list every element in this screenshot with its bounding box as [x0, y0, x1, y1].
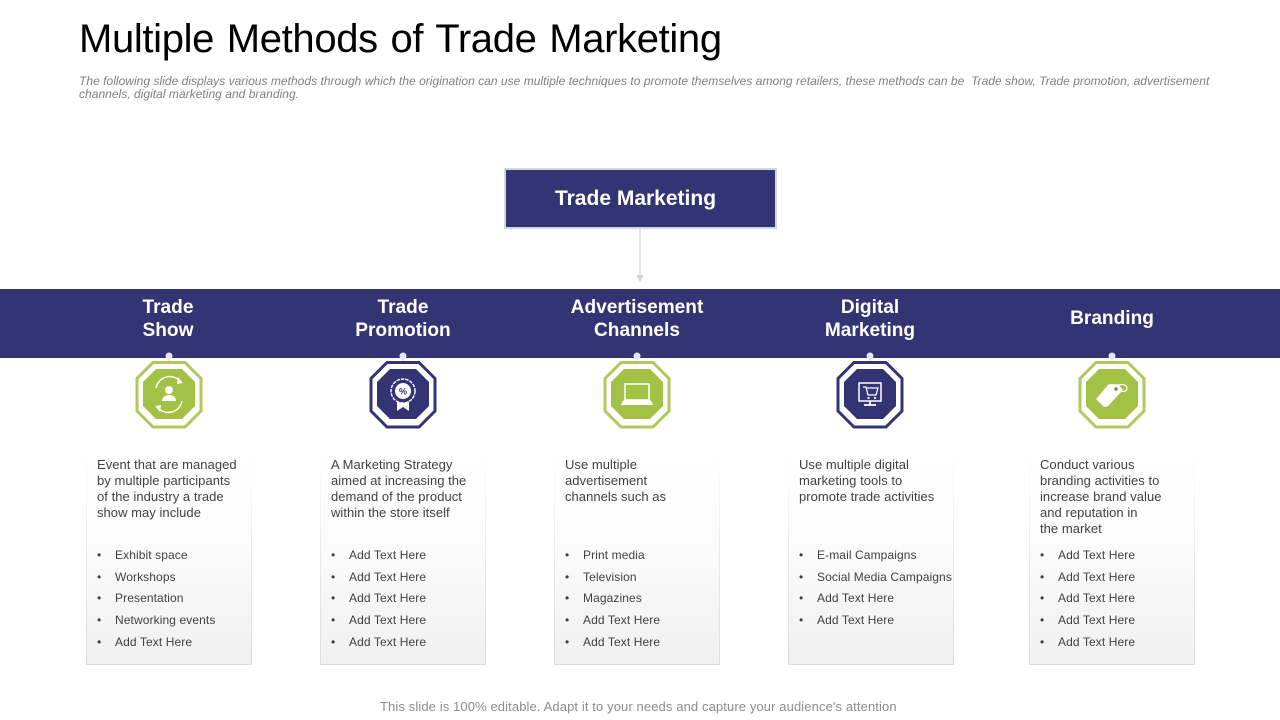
subtitle description: channels, digital marketing and branding. — [79, 87, 299, 101]
list: Trade Promotion bullets: Add Text Here — [349, 613, 426, 627]
icon: advertisement channels badge — [604, 352, 670, 428]
list: Advertisement Channels bullets: Magazines — [583, 591, 642, 605]
text: Branding description: Conduct various — [1040, 457, 1135, 472]
heading: Advertisement Channels: Advertisement — [571, 297, 703, 318]
text: Digital Marketing description: marketing tools to — [799, 473, 902, 488]
card: Trade Show — [86, 455, 252, 665]
text: Branding description: branding activities to — [1040, 473, 1159, 488]
list: Digital Marketing bullets: Social Media Campaigns — [817, 570, 952, 584]
text: Trade Promotion description: aimed at increasing the — [331, 473, 466, 488]
text: Branding description: and reputation in — [1040, 505, 1138, 520]
list: Advertisement Channels bullets — [566, 548, 660, 649]
text: Branding description: increase brand value — [1040, 489, 1162, 504]
list: Digital Marketing bullets: Add Text Here — [817, 613, 894, 627]
list: Trade Promotion bullets: Add Text Here — [349, 635, 426, 649]
text: Trade Show description: Event that are managed — [97, 457, 237, 472]
banner: method headings — [0, 289, 1280, 358]
text: Trade Show description: of the industry a trade — [97, 489, 224, 504]
root box: Trade Marketing: Trade Marketing — [555, 187, 716, 210]
card: Branding — [1029, 455, 1195, 665]
heading: Branding: Branding — [1070, 308, 1154, 329]
heading: Digital Marketing — [825, 297, 915, 341]
list: Advertisement Channels bullets: Print media — [583, 548, 645, 562]
subtitle description: The following slide displays various methods through which the origination can use multiple techniques to promote themselves among retailers, these methods can be Trade show, Trade promotion, advertisement — [79, 74, 1209, 88]
list: Branding bullets: Add Text Here — [1058, 570, 1135, 584]
list: Trade Show bullets: Presentation — [115, 591, 184, 605]
heading: Trade Show — [142, 297, 194, 341]
text: Trade Promotion description: within the store itself — [331, 505, 450, 520]
heading: Digital Marketing: Marketing — [825, 320, 915, 341]
list: Advertisement Channels bullets: Television — [583, 570, 637, 584]
list: Trade Show bullets: Exhibit space — [115, 548, 188, 562]
icon: trade show badge — [136, 352, 202, 428]
heading: Advertisement Channels — [571, 297, 704, 341]
subtitle description — [79, 74, 1210, 101]
list: Advertisement Channels bullets: Add Text Here — [583, 613, 660, 627]
list: Branding bullets: Add Text Here — [1058, 548, 1135, 562]
title: Multiple Methods of Trade Marketing — [79, 17, 722, 61]
text: Trade Show description: show may include — [97, 505, 201, 520]
text: Branding description — [1040, 457, 1162, 536]
list: Branding bullets: Add Text Here — [1058, 613, 1135, 627]
card: Trade Promotion — [320, 455, 486, 665]
heading: Trade Promotion: Trade — [378, 297, 428, 318]
text: Advertisement Channels description: Use multiple — [565, 457, 637, 472]
list: Trade Show bullets — [98, 548, 215, 649]
icon: trade promotion badge — [370, 352, 436, 428]
footer note: This slide is 100% editable. Adapt it to your needs and capture your audience's attention — [380, 699, 897, 714]
card: Advertisement Channels — [554, 455, 720, 665]
list: Trade Show bullets: Networking events — [115, 613, 215, 627]
root box: Trade Marketing — [504, 168, 777, 229]
text: Branding description: the market — [1040, 521, 1102, 536]
text: Trade Show description: by multiple participants — [97, 473, 230, 488]
list: Digital Marketing bullets — [800, 548, 952, 627]
text: Advertisement Channels description — [565, 457, 666, 504]
heading: Advertisement Channels: Channels — [594, 320, 680, 341]
list: Trade Promotion bullets — [332, 548, 426, 649]
text: Trade Promotion description: A Marketing Strategy — [331, 457, 452, 472]
list: Digital Marketing bullets: Add Text Here — [817, 591, 894, 605]
list: Trade Promotion bullets: Add Text Here — [349, 591, 426, 605]
list: Branding bullets — [1040, 548, 1135, 649]
text: Digital Marketing description: promote trade activities — [799, 489, 934, 504]
list: Trade Show bullets: Workshops — [115, 570, 176, 584]
text: Trade Promotion description — [331, 457, 466, 520]
text: Digital Marketing description — [799, 457, 934, 504]
list: Digital Marketing bullets: E-mail Campaigns — [817, 548, 917, 562]
list: Trade Promotion bullets: Add Text Here — [349, 548, 426, 562]
card: Digital Marketing — [788, 455, 954, 665]
heading: Digital Marketing: Digital — [841, 297, 899, 318]
list: Branding bullets: Add Text Here — [1058, 635, 1135, 649]
icon: digital marketing badge — [836, 352, 904, 428]
text: Advertisement Channels description: channels such as — [565, 489, 666, 504]
list: Trade Promotion bullets: Add Text Here — [349, 570, 426, 584]
list: Branding bullets: Add Text Here — [1058, 591, 1135, 605]
icon: trade promotion badge: % — [399, 386, 407, 396]
heading: Trade Promotion: Promotion — [355, 320, 451, 341]
text: Advertisement Channels description: advertisement — [565, 473, 647, 488]
heading: Trade Promotion — [355, 297, 451, 341]
arrow: root to banner — [636, 228, 644, 282]
list: Advertisement Channels bullets: Add Text Here — [583, 635, 660, 649]
icon: branding badge — [1078, 352, 1146, 428]
text: Digital Marketing description: Use multiple digital — [799, 457, 909, 472]
list: Trade Show bullets: Add Text Here — [115, 635, 192, 649]
heading: Trade Show: Show — [143, 320, 193, 341]
text: Trade Show description — [97, 457, 237, 520]
heading: Trade Show: Trade — [143, 297, 193, 318]
text: Trade Promotion description: demand of the product — [331, 489, 462, 504]
